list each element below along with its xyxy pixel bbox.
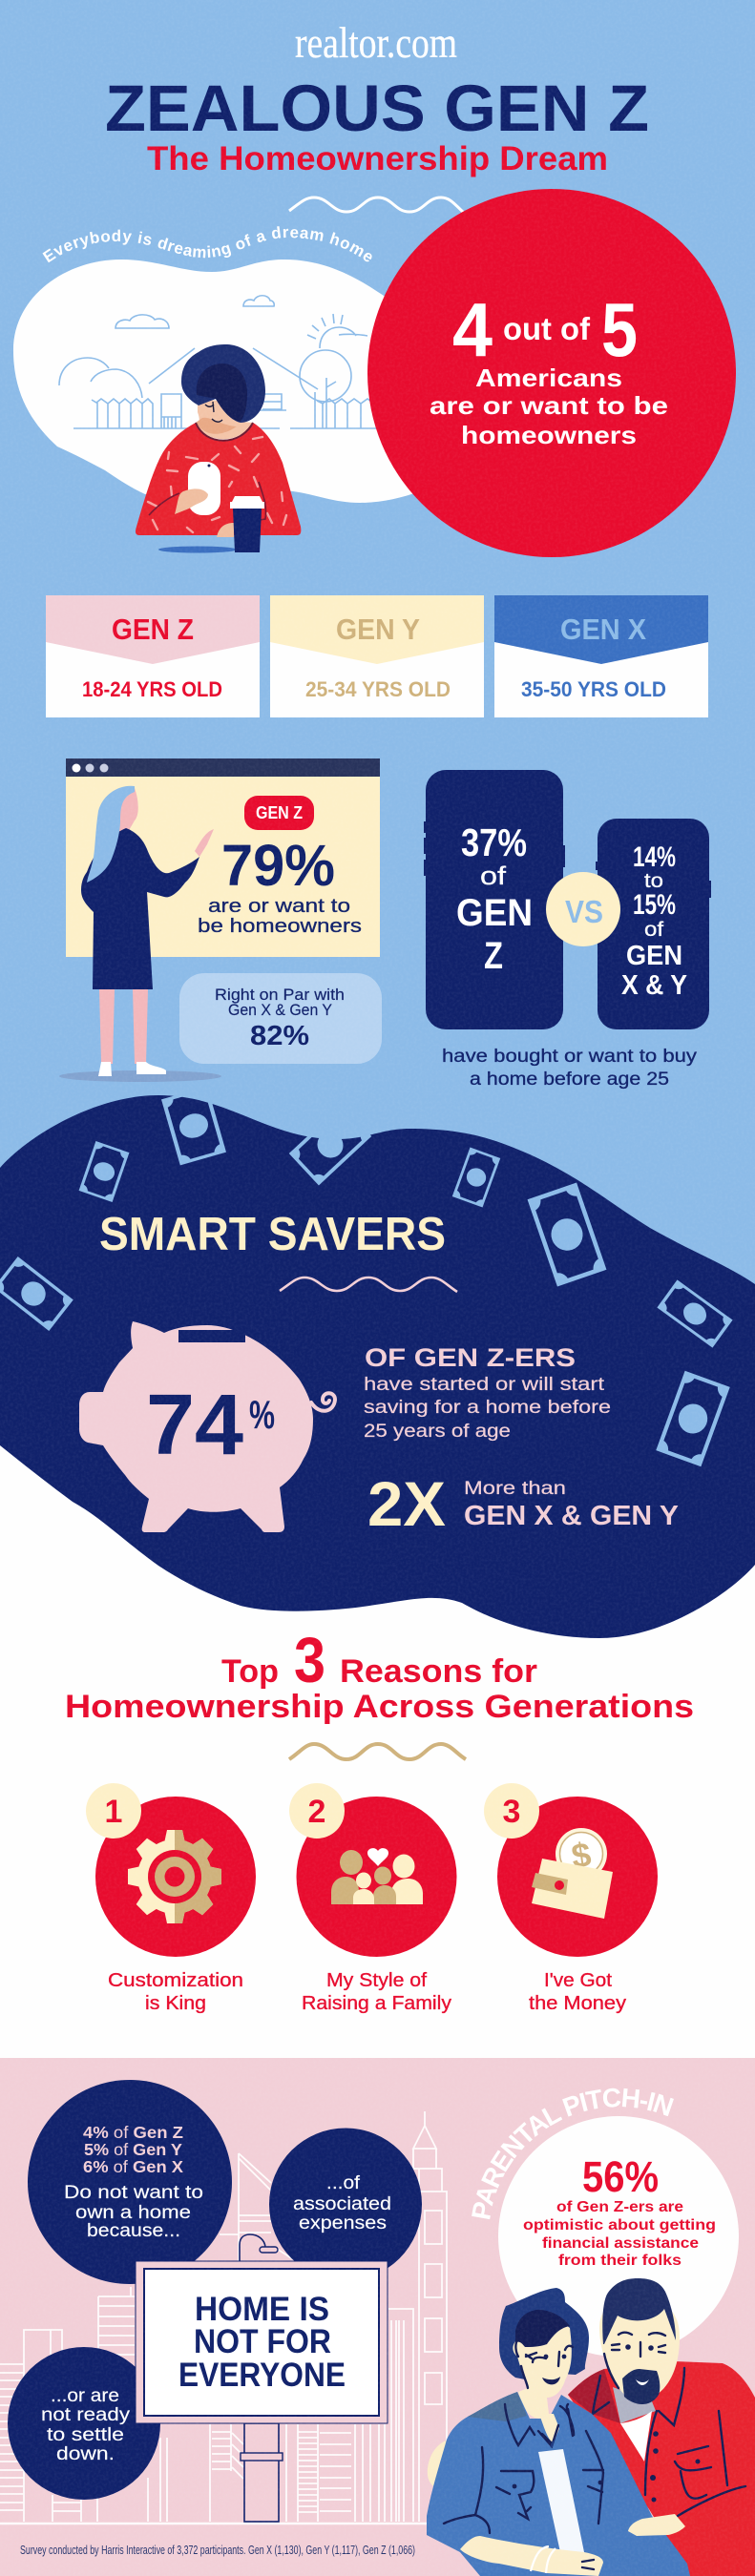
curved caption: Everybody is dreaming of a dream home [42,226,372,263]
number badge [484,1783,539,1839]
phone: 37% of Gen Z: 37% [461,821,527,864]
heading: top 3 reasons: Reasons for [340,1653,537,1690]
logo: realtor.com: realtor.com [295,19,457,67]
caption [523,2199,716,2269]
icon: wallet with coin: $ [569,1835,594,1876]
bubble: associated expenses: associated [293,2193,391,2214]
callout: 4 out of 5 [367,189,736,557]
VS badge: VS [565,894,603,929]
coffee cup [230,496,264,552]
bubble: not ready to settle down: down. [56,2443,115,2464]
background: blue upper area [0,0,755,1431]
heading: top 3 reasons [65,1625,694,1725]
arm lines [149,482,266,520]
56% stat: 56% [582,2152,659,2201]
panel: Gen Z age card [46,595,260,717]
phone: 14% to 15% of Gen X & Y: to [644,870,663,892]
caption: be homeowners [198,915,362,937]
label: I've Got [544,1970,612,1991]
phone: 14% to 15% of Gen X & Y [596,819,711,1029]
stat: 4 out of 5: out of [503,311,591,346]
phone: 14% to 15% of Gen X & Y: 15% [633,889,676,921]
label [529,1970,626,2014]
sign text [178,2290,346,2394]
stat: 4 out of 5: 5 [601,287,638,372]
caption: of Gen Z-ers are [556,2199,683,2215]
sign text: NOT FOR [194,2322,331,2360]
phone: 37% of Gen Z: Z [484,935,503,977]
illustration: woman with phone and coffee [136,344,301,553]
woman [427,2288,690,2576]
bubble: not ready to settle down: ...or are [51,2385,119,2406]
phone: 14% to 15% of Gen X & Y: GEN [626,941,682,971]
panel: Gen Z age card: GEN Z [112,613,194,646]
window bar [66,758,380,777]
phone: 37% of Gen Z: GEN [456,892,533,934]
bubble: not ready to settle down: not ready [41,2404,130,2425]
panel: browser window stat [66,758,380,957]
2X stat: More than [464,1478,566,1499]
caption: from their folks [558,2253,682,2269]
icon: wallet with coin [532,1828,613,1919]
panel: Gen X age card [494,595,708,717]
caption: Americans [475,364,622,392]
phone: 37% of Gen Z: of [480,862,507,890]
caption: financial assistance [542,2235,699,2252]
2X stat: GEN X & GEN Y [464,1501,679,1531]
bubble: not ready to settle down [8,2347,160,2500]
label [108,1970,243,2014]
panel: right on par with [179,973,382,1064]
hand [195,829,214,857]
shoes [98,1062,166,1076]
bubble: do not want to own a home: 5% of Gen Y [84,2140,182,2159]
piggy bank: % [249,1392,275,1437]
stat: 4 out of 5 [452,287,638,372]
phone: 14% to 15% of Gen X & Y: of [644,919,663,941]
billboard sign [136,2234,388,2522]
phones caption: have bought or want to buy [442,1046,697,1067]
number badge: 1 [105,1794,122,1830]
dress [81,828,199,989]
bubble: do not want to own a home: Do not want to [64,2182,203,2203]
line drawing: neighbourhood [59,296,376,428]
number badge [86,1783,141,1839]
label: My Style of [326,1970,427,1991]
phone [188,462,220,515]
Gen Z pill [244,796,314,830]
savings text [364,1343,611,1442]
number badge [289,1783,345,1839]
reason 3: got the money [484,1783,658,2014]
phone: 37% of Gen Z [424,770,565,1029]
legs [99,989,148,1064]
bubble: associated expenses: ...of [326,2172,361,2193]
panel: parental pitch-in [472,2088,739,2356]
savings text: OF GEN Z-ERS [365,1343,576,1372]
sign text: EVERYONE [178,2356,346,2394]
squiggle divider [289,197,464,213]
background: pink footer area [0,2058,755,2576]
panel: right on par with: Gen X & Gen Y [228,1002,332,1019]
hair [181,344,265,423]
phones caption: a home before age 25 [470,1069,669,1090]
subtitle: The Homeownership Dream [147,140,608,177]
panel: Gen Y age card [270,595,484,717]
hair [87,786,135,883]
squiggle divider [280,1278,457,1292]
label [302,1970,451,2014]
face features [205,402,222,422]
man [568,2278,755,2576]
panel: Gen Y age card: 25-34 YRS OLD [305,677,451,701]
sign text: HOME IS [195,2290,329,2328]
phones caption [442,1046,697,1090]
heading: top 3 reasons: 3 [294,1625,325,1696]
panel: Gen Z age card: 18-24 YRS OLD [82,677,222,701]
caption: are or want to be [430,391,668,420]
lamp [240,2234,278,2261]
VS badge [546,872,620,946]
hand [175,488,208,514]
panel: dream home scene [13,226,412,503]
savings text: 25 years of age [364,1421,511,1442]
2X stat: 2X [367,1468,446,1539]
panel: Gen Y age card: GEN Y [336,613,420,646]
piggy bank [79,1321,335,1532]
piggy bank: 74 [146,1378,243,1473]
curved heading: PARENTAL PITCH-IN [472,2088,674,2219]
label: Raising a Family [302,1993,451,2014]
savings text: have started or will start [364,1374,605,1395]
stat: 4 out of 5: 4 [452,287,493,372]
navy blob [0,1095,755,1638]
dream cloud blob [13,260,420,503]
panel: smart savers [0,1089,755,1638]
icon: gear [128,1830,221,1923]
table shadow [158,546,237,553]
number badge: 2 [308,1794,325,1830]
reason 1: customization [86,1783,256,2014]
panel: right on par with: 82% [250,1021,309,1051]
squiggle divider [289,1744,466,1759]
panel: right on par with: Right on Par with [215,987,345,1004]
bubble: do not want to own a home: own a home [75,2202,191,2223]
man's hand [628,2514,685,2536]
bubble: associated expenses [269,2128,422,2280]
panel: Gen X age card: GEN X [560,613,646,646]
bubble: do not want to own a home: 4% of Gen Z [83,2123,183,2142]
bubble: do not want to own a home: because... [87,2220,180,2241]
line art: city skyline [0,2111,447,2524]
panel: Gen X age card: 35-50 YRS OLD [521,677,666,701]
caption: optimistic about getting [523,2217,716,2233]
caption [430,364,668,449]
background: white middle area [0,1336,755,2061]
label: Customization [108,1970,243,1991]
caption [198,895,362,937]
reason 2: raising a family [289,1783,456,2014]
bubble: do not want to own a home: 6% of Gen X [83,2157,183,2176]
head [118,788,138,832]
caption: homeowners [461,421,637,449]
heading: top 3 reasons: Homeownership Across Generations [65,1689,694,1725]
sweater [136,423,301,535]
label: is King [145,1993,206,2014]
illustration: presenting woman [59,786,221,1082]
jacket [427,2392,690,2576]
savings text: saving for a home before [364,1397,611,1418]
confetti pattern [148,437,286,532]
neck and face [196,399,253,439]
caption: are or want to [208,895,350,917]
bubble: not ready to settle down: to settle [47,2424,124,2445]
bubble: associated expenses: expenses [299,2212,387,2233]
post [241,2423,283,2522]
footer: survey note: Survey conducted by Harris Interactive of 3,372 participants. Gen X (1,130), Gen Y (1,117), Gen Z (1,066) [20,2543,415,2557]
forearm [460,2536,603,2576]
icon: family [331,1848,423,1904]
number badge: 3 [503,1794,520,1830]
illustration: couple [427,2278,755,2576]
79% stat: 79% [221,833,335,898]
heading: SMART SAVERS [99,1209,446,1260]
title: ZEALOUS GEN Z [105,72,649,145]
phone: 14% to 15% of Gen X & Y: 14% [633,841,676,873]
heading: top 3 reasons: Top [221,1653,279,1690]
bubble: do not want to own a home [28,2080,232,2284]
2X stat [367,1468,679,1539]
phone: 14% to 15% of Gen X & Y: X & Y [621,970,687,1001]
flying bills [0,1089,730,1465]
label: the Money [529,1993,626,2014]
Gen Z pill: GEN Z [256,803,303,822]
